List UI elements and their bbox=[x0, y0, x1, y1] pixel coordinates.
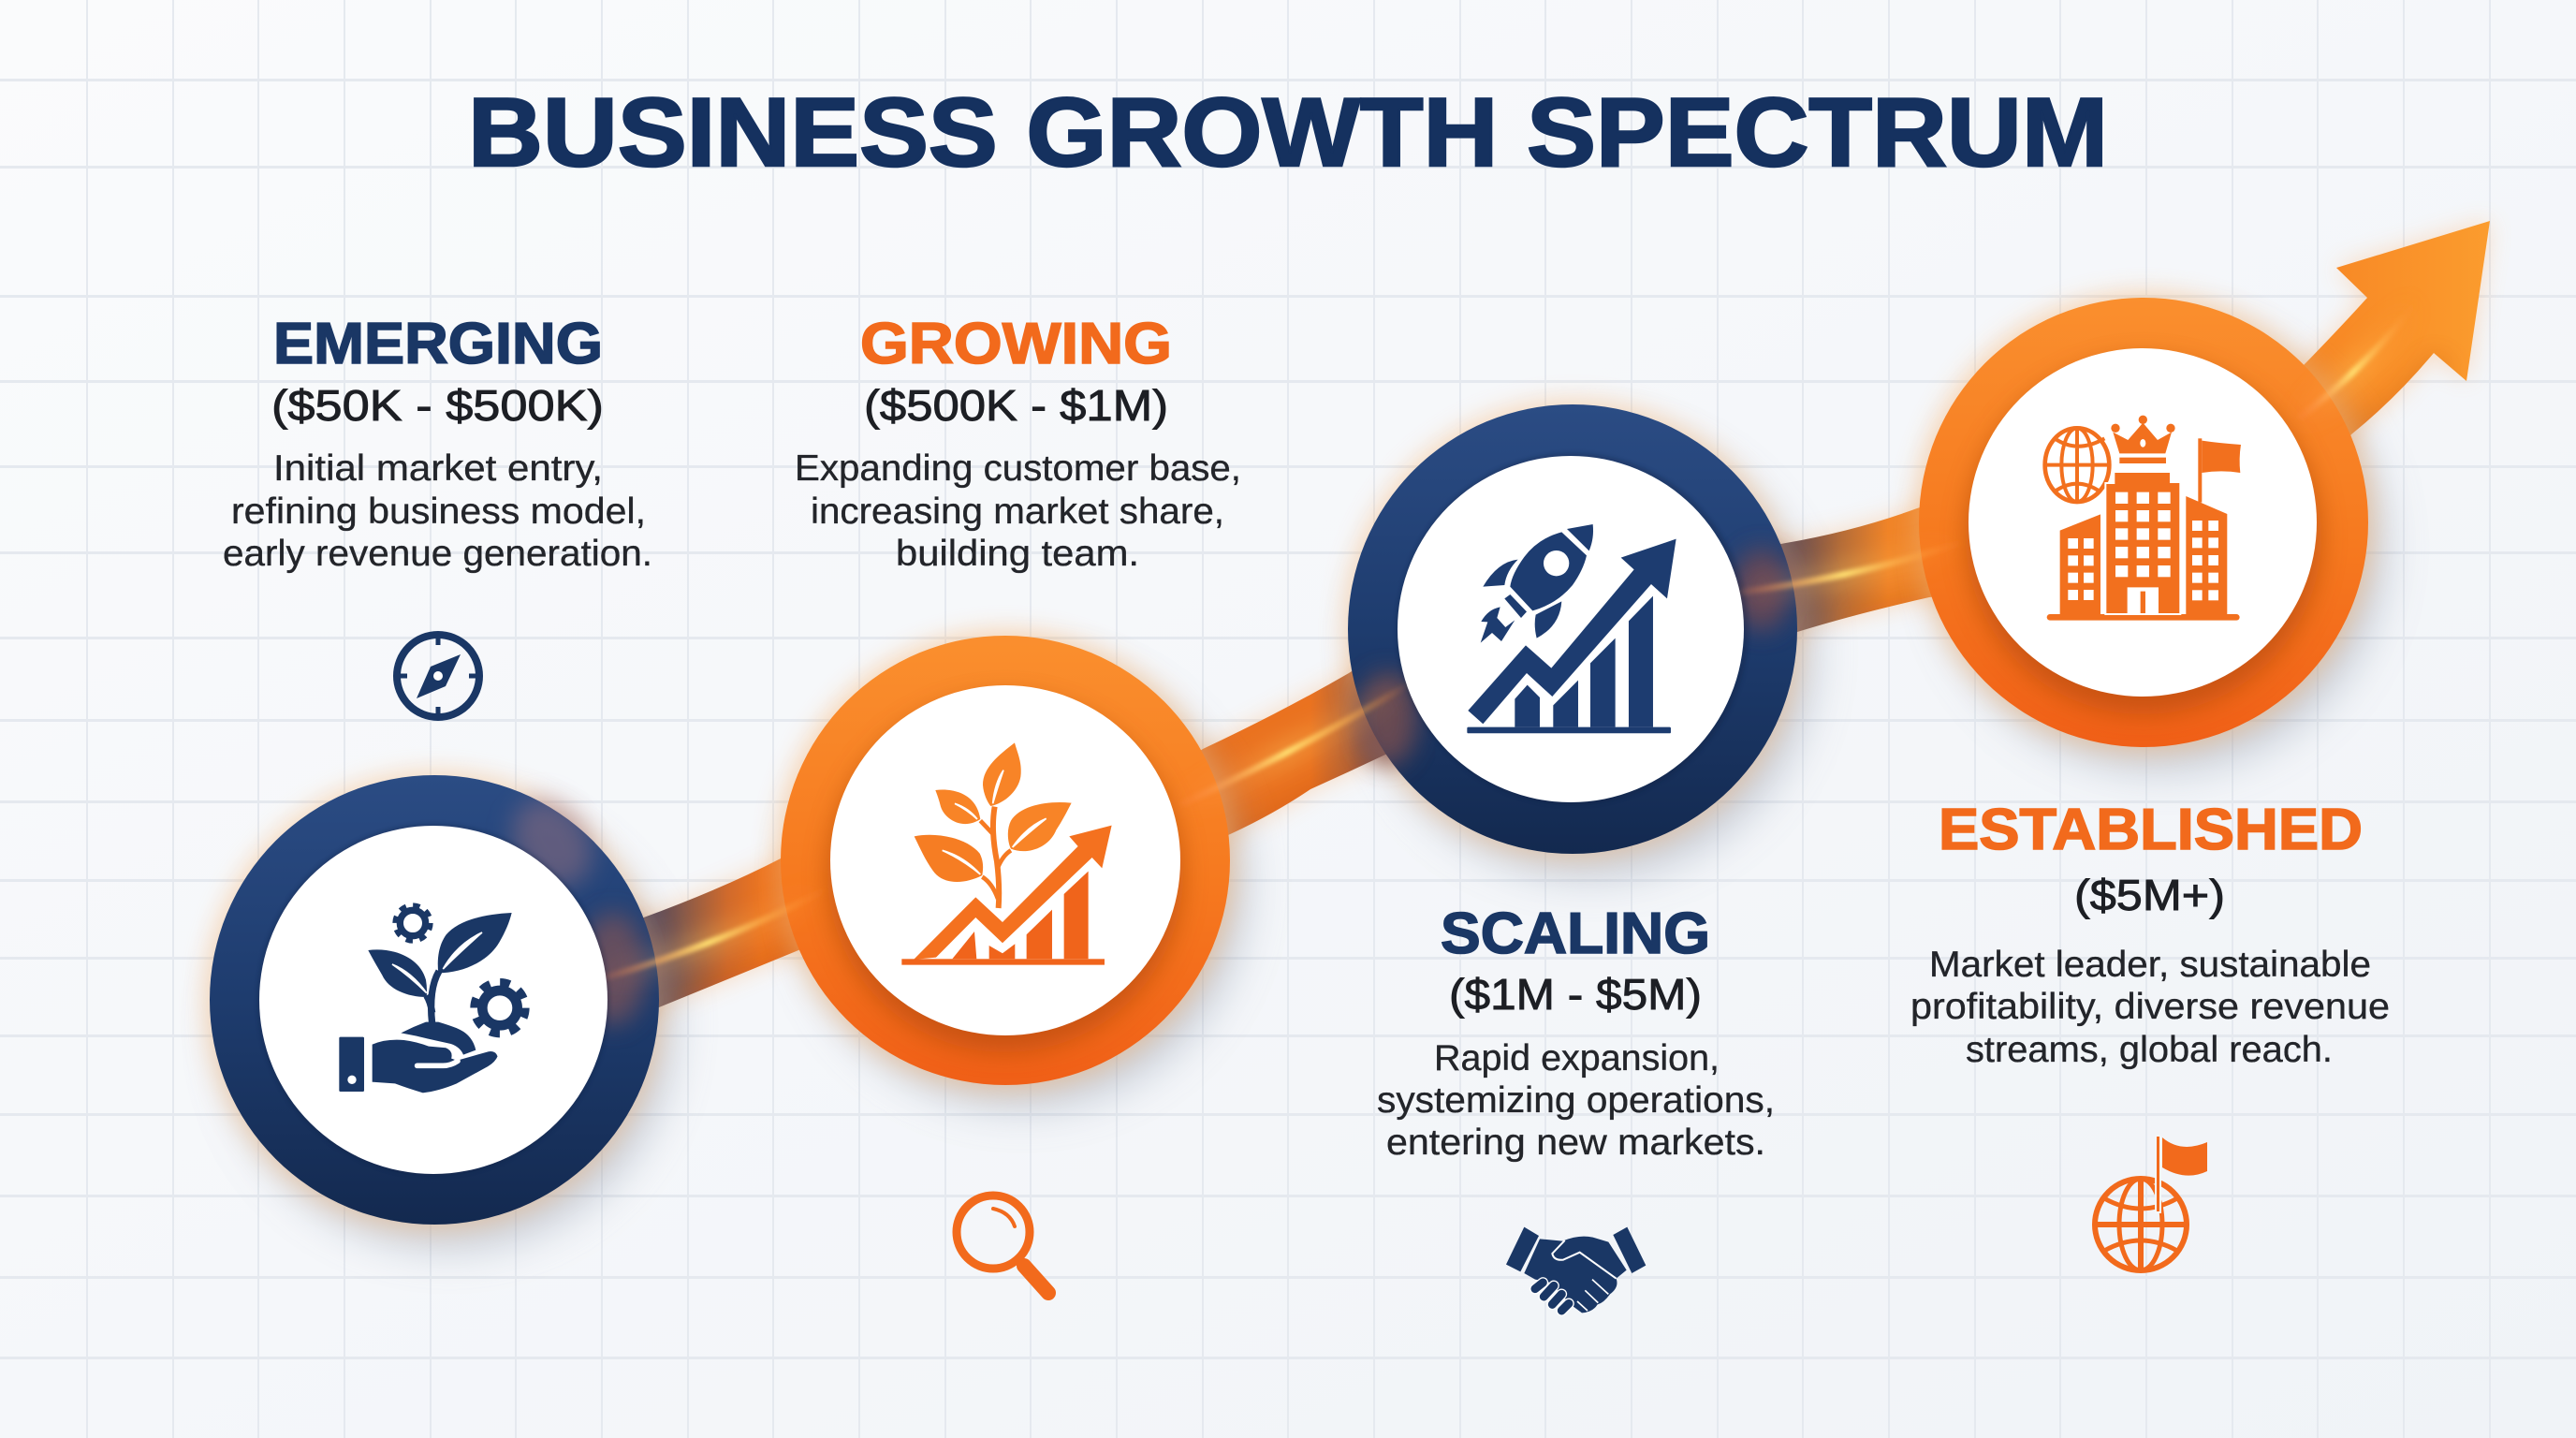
description: Rapid expansion, bbox=[1434, 1038, 1720, 1078]
heading: established: ESTABLISHED bbox=[1939, 798, 2363, 862]
stage node 1: navy ring bbox=[204, 771, 672, 1248]
heading: scaling: SCALING bbox=[1441, 902, 1710, 966]
description bbox=[223, 448, 652, 574]
panel: emerging bbox=[223, 312, 652, 717]
icon: globe with flag bbox=[2095, 1136, 2207, 1270]
description bbox=[1377, 1038, 1775, 1163]
description: increasing market share, bbox=[811, 492, 1224, 532]
icon: hand with plant and gears bbox=[339, 905, 525, 1093]
stage node 3: navy ring bbox=[1343, 400, 1812, 876]
icon: compass bbox=[397, 635, 479, 717]
panel: scaling bbox=[1377, 902, 1775, 1313]
growth arrow ribbon bbox=[599, 221, 2490, 1030]
description: Initial market entry, bbox=[273, 448, 603, 489]
description: systemizing operations, bbox=[1377, 1080, 1775, 1121]
description bbox=[1910, 945, 2390, 1070]
description: refining business model, bbox=[231, 492, 646, 532]
panel: growing bbox=[795, 312, 1241, 1293]
description: early revenue generation. bbox=[223, 534, 652, 574]
description: profitability, diverse revenue bbox=[1910, 987, 2390, 1027]
icon: rocket and rising chart bbox=[1467, 524, 1676, 733]
white discs bbox=[259, 348, 2317, 1174]
description: building team. bbox=[896, 534, 1139, 574]
icon: corporate tower with crown, globe and flag bbox=[2045, 416, 2241, 621]
heading: growing: GROWING bbox=[860, 312, 1172, 376]
description: entering new markets. bbox=[1386, 1123, 1765, 1163]
heading: emerging: EMERGING bbox=[273, 312, 603, 376]
icon: sprout growth chart bbox=[901, 742, 1112, 965]
panel: established bbox=[1910, 798, 2390, 1270]
stage node 4: orange ring bbox=[1913, 292, 2383, 770]
revenue range: ($5M+) bbox=[2074, 871, 2225, 919]
description: Expanding customer base, bbox=[795, 448, 1241, 489]
ribbon highlights bbox=[608, 301, 2417, 976]
description bbox=[795, 448, 1241, 574]
stage node 2: orange ring bbox=[775, 630, 1245, 1108]
description: streams, global reach. bbox=[1966, 1030, 2333, 1070]
description: Market leader, sustainable bbox=[1929, 945, 2371, 985]
revenue range: ($50K - $500K) bbox=[271, 381, 604, 430]
icon: magnifier bbox=[957, 1196, 1048, 1293]
revenue range: ($1M - $5M) bbox=[1449, 970, 1702, 1019]
title: BUSINESS GROWTH SPECTRUM bbox=[468, 79, 2108, 187]
revenue range: ($500K - $1M) bbox=[864, 381, 1168, 430]
icon: handshake bbox=[1506, 1227, 1646, 1313]
